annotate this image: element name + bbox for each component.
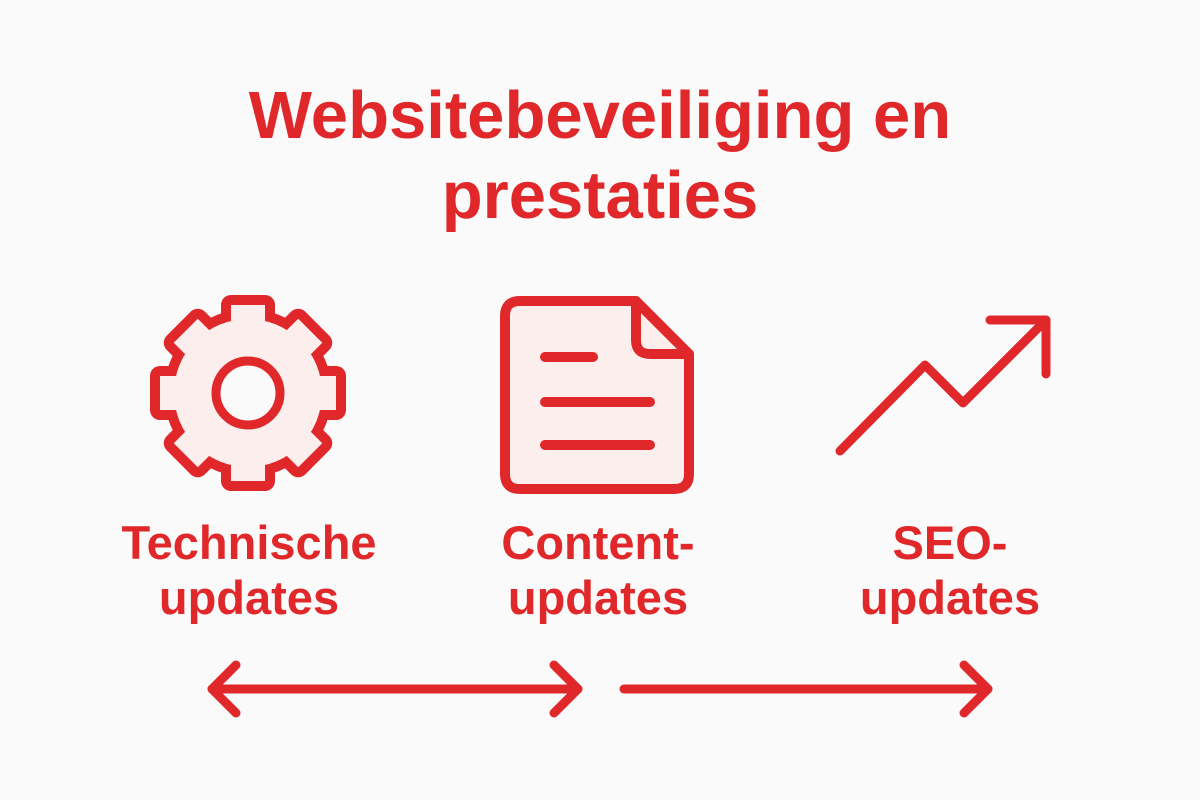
label: seo-updates: [860, 516, 1040, 624]
label: technische updates: updates: [159, 571, 339, 624]
icon: gear: [160, 305, 336, 481]
title: prestaties: [442, 158, 758, 233]
icon: document: [505, 301, 689, 489]
arrow: double: [212, 665, 578, 713]
title: Websitebeveiliging en: [249, 78, 951, 153]
label: technische updates: [121, 516, 377, 624]
title: [248, 78, 951, 233]
label: seo-updates: updates: [860, 571, 1040, 624]
label: technische updates: Technische: [121, 516, 377, 569]
label: content-updates: Content-: [501, 516, 695, 569]
arrow: right: [624, 665, 988, 713]
icon: trend arrow: [840, 320, 1046, 451]
label: content-updates: updates: [508, 571, 688, 624]
label: seo-updates: SEO-: [893, 516, 1007, 569]
label: content-updates: [501, 516, 695, 624]
